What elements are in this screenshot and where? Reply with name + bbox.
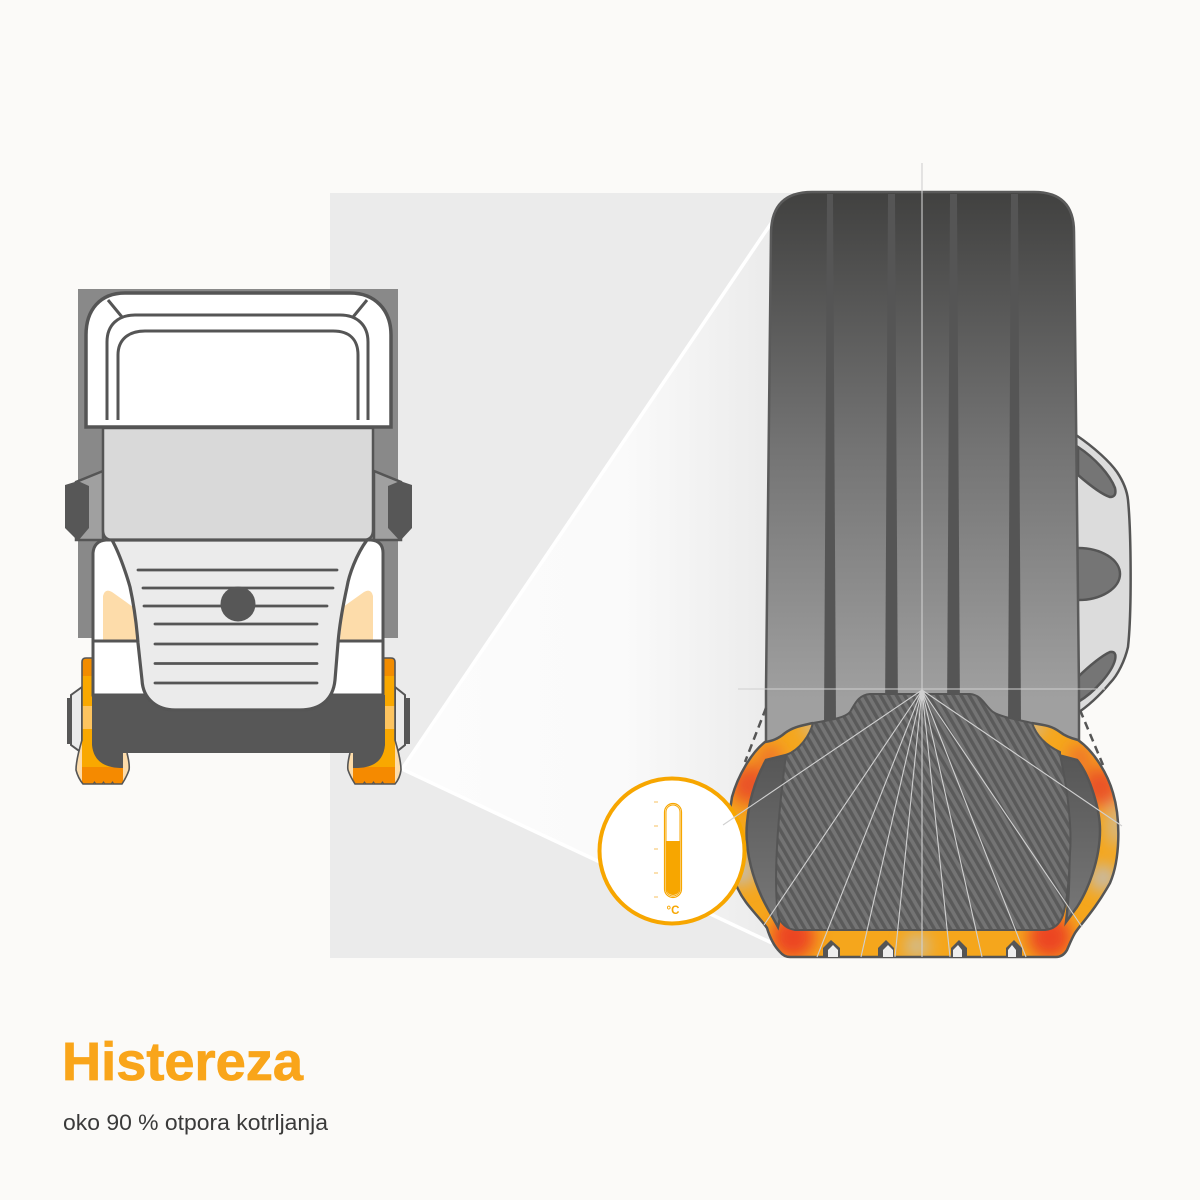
tyre xyxy=(766,192,1131,745)
heat band xyxy=(732,724,1118,956)
thermometer icon xyxy=(654,802,682,898)
subtitle: oko 90 % otpora kotrljanja xyxy=(63,1110,329,1135)
truck xyxy=(65,289,412,784)
band outline xyxy=(729,723,1118,957)
tyre cross-section with heat map xyxy=(720,694,1130,965)
left mirror xyxy=(65,471,103,541)
zoom panel xyxy=(330,193,800,958)
tread grooves xyxy=(824,194,1021,725)
zoom wedge from truck wheel to tyre xyxy=(402,222,772,943)
tread notches xyxy=(823,940,1022,957)
roof cab xyxy=(86,293,391,427)
right mirror xyxy=(374,471,412,541)
radial measurement lines xyxy=(723,163,1122,957)
degree label: °C xyxy=(667,905,679,917)
grille xyxy=(112,540,367,710)
left cavity xyxy=(747,754,790,927)
windshield xyxy=(103,428,373,540)
left wheel xyxy=(67,658,129,784)
tread body xyxy=(766,192,1079,745)
hatched inner section xyxy=(776,694,1071,930)
temperature callout xyxy=(600,778,744,924)
dashed rim guides xyxy=(745,708,1103,765)
right wheel xyxy=(348,658,410,784)
truck rear box xyxy=(78,289,398,638)
front body xyxy=(92,540,385,768)
title: Histereza xyxy=(62,1032,304,1092)
wheel rim xyxy=(1036,435,1131,714)
right cavity xyxy=(1058,755,1100,922)
